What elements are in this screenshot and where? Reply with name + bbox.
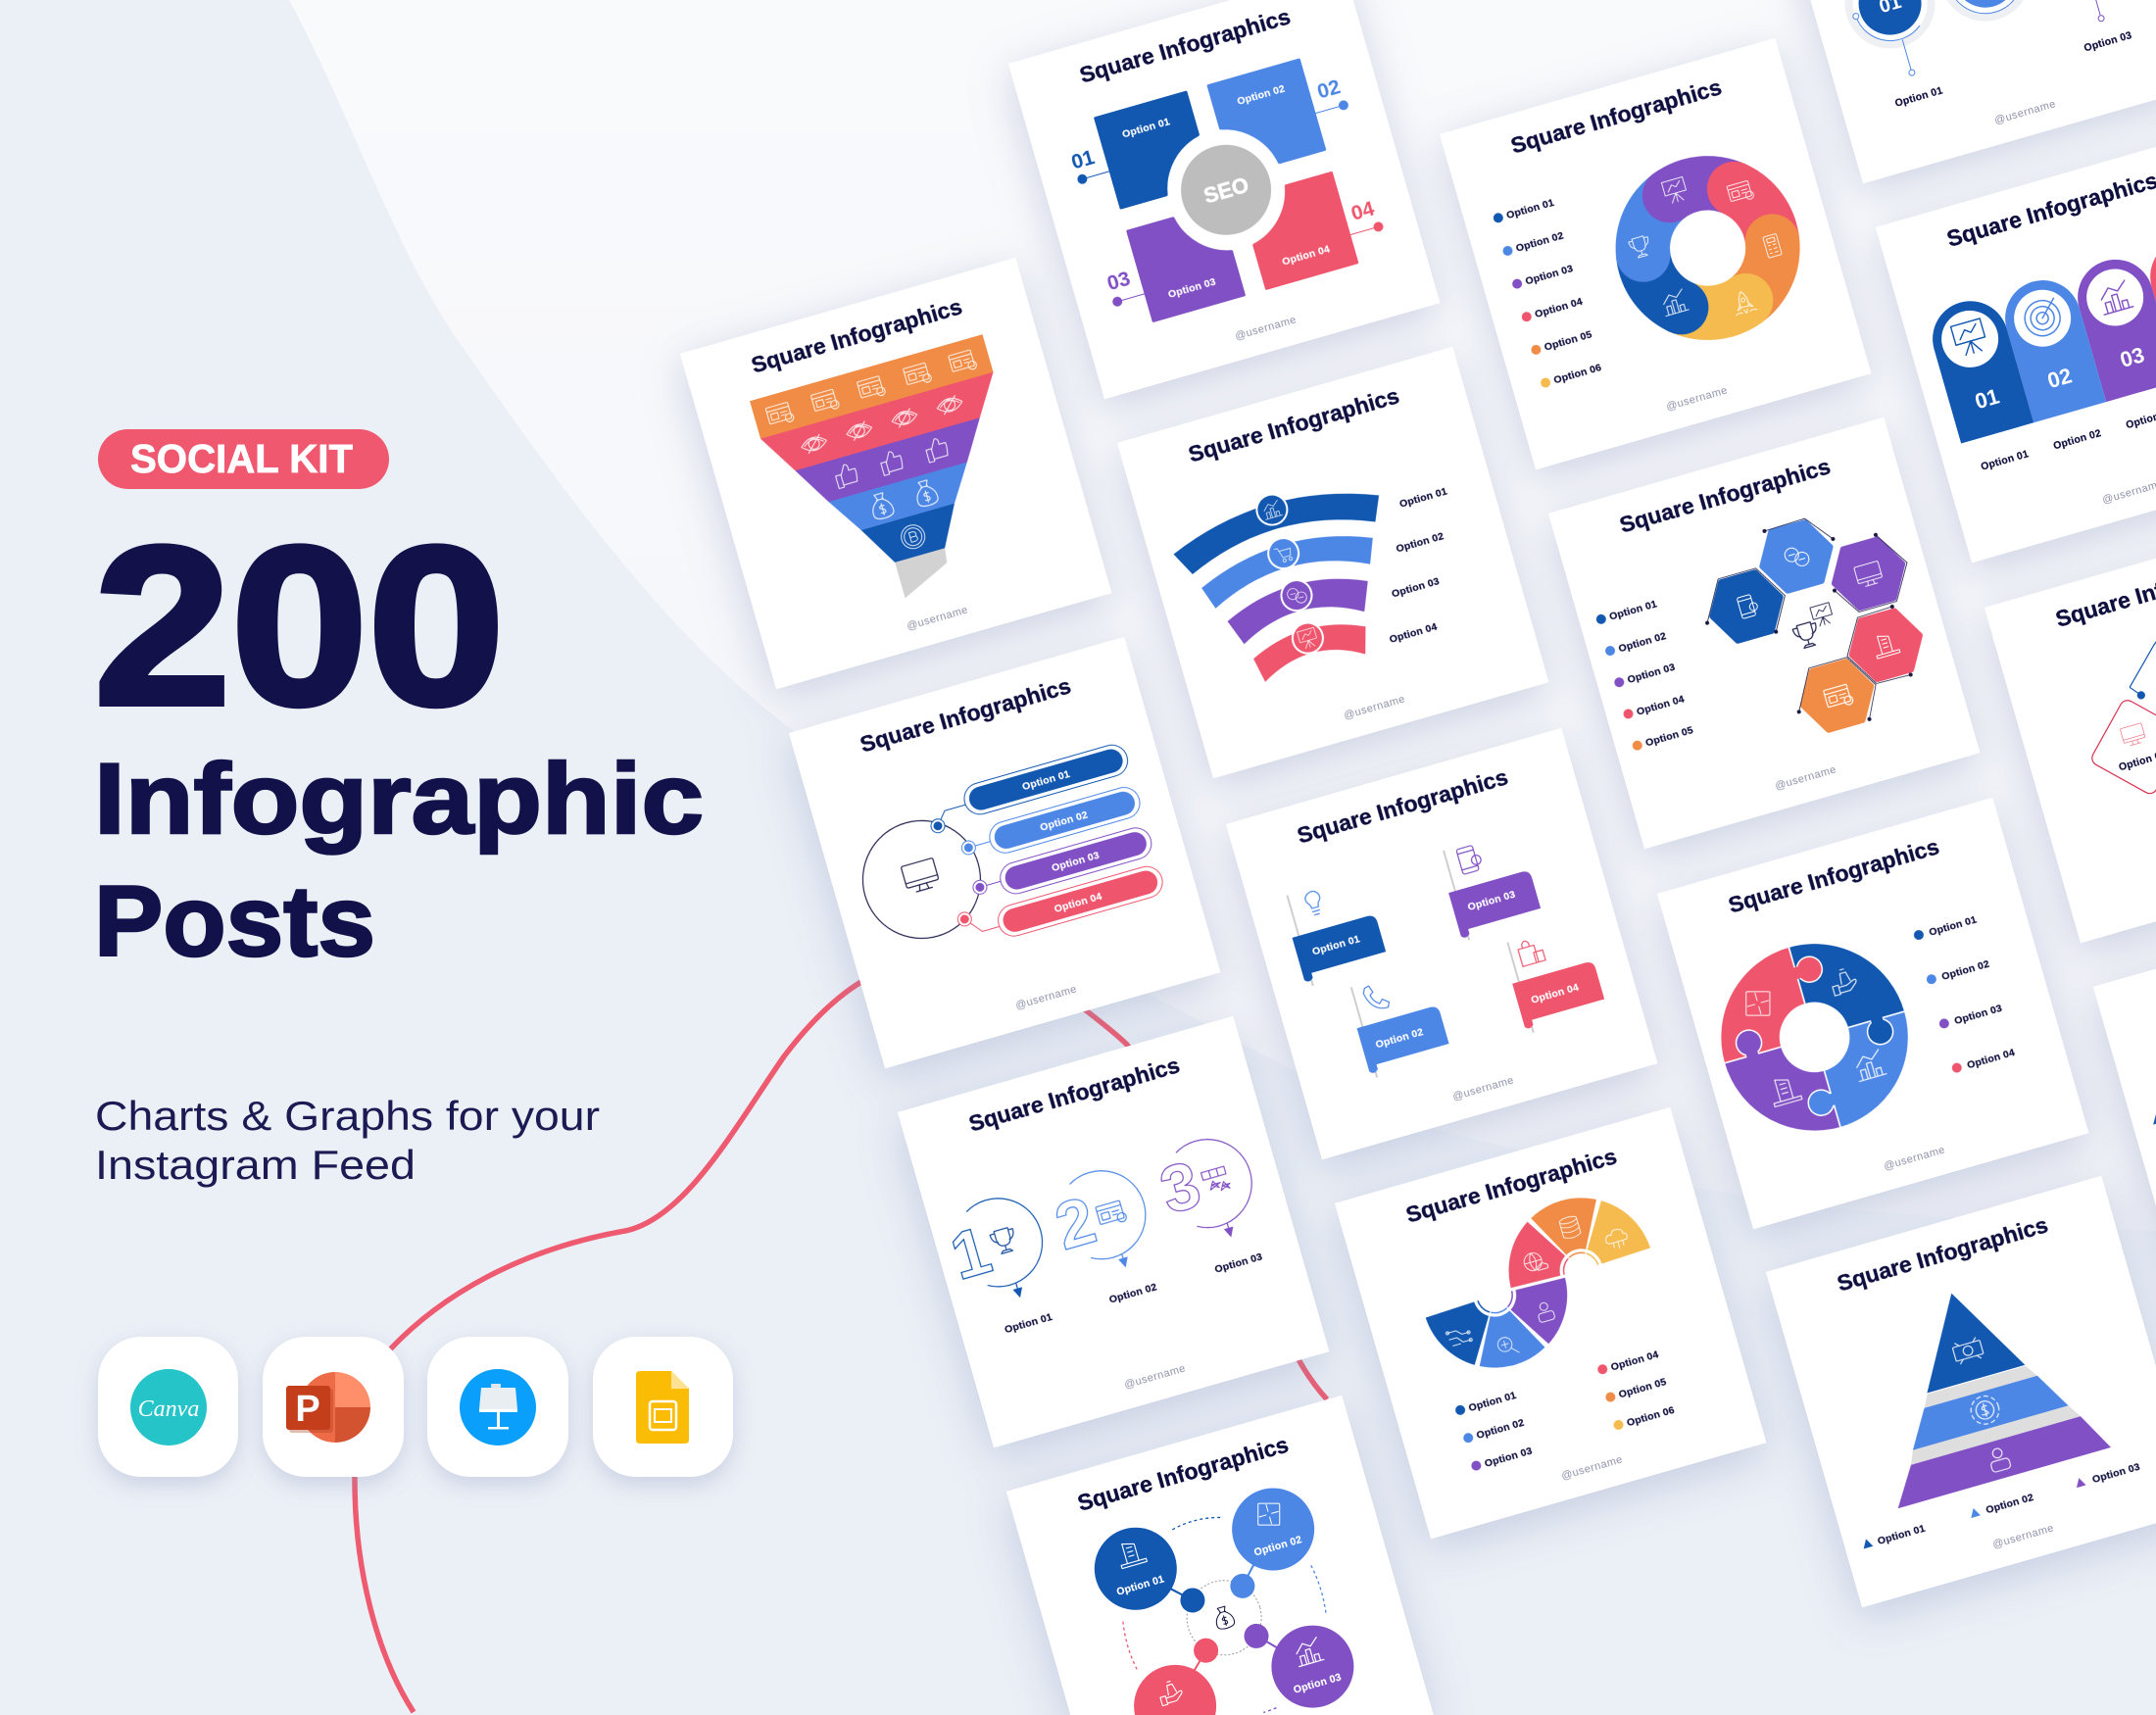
legend: Option 04 <box>1966 1047 2016 1071</box>
card title: Square Infographics <box>1075 1432 1292 1516</box>
hexagon blue <box>1752 512 1845 596</box>
option labels <box>1004 1250 1264 1336</box>
tab 03 <box>2069 251 2156 402</box>
card title: Square Infographics <box>1726 834 1942 918</box>
panel: flags card <box>1226 728 1657 1159</box>
option pills <box>959 741 1166 940</box>
flag 03 <box>1437 829 1544 942</box>
username: @username <box>1123 1362 1187 1392</box>
card title: Square Infographics <box>858 673 1074 758</box>
option labels: Option 02 <box>1107 1281 1158 1306</box>
funnel icons <box>765 349 1020 577</box>
hexagon red <box>1837 600 1930 692</box>
legend: Option 02 <box>1617 630 1668 655</box>
step icons <box>990 1165 1232 1258</box>
panel: pill list card <box>789 637 1220 1068</box>
band icons <box>1260 500 1320 650</box>
SEO circle <box>1170 134 1282 246</box>
subtitle: Instagram Feed <box>95 1142 416 1188</box>
card title: Square Infographics <box>1617 454 1834 538</box>
legend: Option 01 <box>1928 913 1979 939</box>
username: @username <box>1774 763 1838 793</box>
option labels: Option 04 <box>1388 621 1439 646</box>
numbered markers: 04 <box>1348 197 1377 225</box>
icon tile: powerpoint: P <box>295 1389 320 1430</box>
legend right <box>1596 1348 1676 1433</box>
stem dot <box>2097 15 2105 22</box>
funnel chart <box>750 334 1047 624</box>
numbered markers: 01 <box>1069 146 1098 174</box>
circle option 02: Option 02 <box>1252 1534 1303 1558</box>
heading: infographic posts <box>94 743 704 977</box>
panel: numbered circles card <box>898 1016 1329 1447</box>
heading: infographic posts: Infographic <box>94 743 704 855</box>
dashed arrow bottom <box>1263 1708 1277 1712</box>
card title: Square Infographics <box>1295 764 1511 849</box>
legend left <box>1454 1390 1534 1474</box>
username: @username <box>1014 983 1078 1012</box>
panel: network circles card <box>1006 1396 1434 1715</box>
app tiles <box>98 1337 733 1477</box>
light curved background shape <box>289 0 2156 1231</box>
panel: numbered tabs card <box>1876 131 2156 563</box>
option labels: Option 01 <box>1398 485 1448 511</box>
block labels: Option 03 <box>1167 276 1217 301</box>
panel: hexagons card <box>1548 417 1980 849</box>
central dotted ring <box>1178 1572 1270 1664</box>
tab labels <box>1980 407 2156 473</box>
icon: monitor <box>2120 723 2146 747</box>
circle option 03: Option 03 <box>1293 1671 1343 1696</box>
hexagon navy <box>1694 563 1794 652</box>
legend: Option 05 <box>1644 724 1694 749</box>
option labels: Option 03 <box>1213 1250 1264 1276</box>
tab 03: 03 <box>2117 342 2147 372</box>
legend right: Option 04 <box>1609 1348 1660 1374</box>
legend: Option 03 <box>1953 1003 2004 1027</box>
icon: money bag <box>1212 1605 1236 1631</box>
legend: Option 02 <box>1984 1492 2035 1516</box>
block labels: Option 02 <box>1236 82 1287 108</box>
step 3: 3 <box>1152 1147 1208 1228</box>
panel: six segment donut card <box>1440 38 1871 469</box>
card title: Square Infographics <box>1186 383 1402 467</box>
tab 02 <box>1996 271 2106 422</box>
legend <box>1594 598 1694 753</box>
connectors and dots <box>928 801 1013 937</box>
username: @username <box>1234 314 1298 343</box>
subtitle: Charts & Graphs for your <box>95 1093 600 1139</box>
blue marker <box>2150 1112 2156 1125</box>
panel: funnel card <box>680 258 1111 689</box>
card title: Square Infographics <box>1508 74 1725 159</box>
legend: Option 01 <box>1877 1523 1927 1547</box>
username: @username <box>1451 1074 1515 1103</box>
legend: Option 03 <box>1524 263 1575 287</box>
numbered markers <box>1069 74 1385 308</box>
red curved line <box>355 956 1327 1712</box>
flag 02: Option 02 <box>1374 1026 1425 1051</box>
numbered markers: 02 <box>1315 75 1343 104</box>
subtitle <box>95 1093 600 1188</box>
legend: Option 01 <box>1505 197 1555 221</box>
circle option 01: Option 01 <box>1115 1573 1166 1598</box>
curved bands <box>1167 474 1420 698</box>
tab 01 <box>1924 292 2034 444</box>
legend right: Option 05 <box>1617 1376 1668 1400</box>
panel: puzzle donut card <box>1657 798 2088 1229</box>
legend right: Option 06 <box>1626 1404 1676 1429</box>
step 3 <box>1152 1129 1265 1250</box>
username: @username <box>1883 1144 1946 1173</box>
panel: arc bands card <box>1117 347 1548 778</box>
legend left: Option 01 <box>1467 1390 1518 1414</box>
badge: social kit: SOCIAL KIT <box>130 436 353 481</box>
legend: Option 06 <box>1552 362 1603 386</box>
block labels <box>1121 82 1333 301</box>
username: @username <box>1560 1453 1624 1483</box>
option pills: Option 03 <box>1051 850 1101 874</box>
links and nodes <box>1164 1559 1283 1678</box>
username: @username <box>1343 693 1406 722</box>
icon tile: canva: Canva <box>138 1396 199 1422</box>
panel: pyramid card <box>1766 1176 2156 1607</box>
card shadows <box>680 0 2156 1715</box>
panel: top right ringed circles card <box>1767 0 2156 183</box>
option labels: Option 02 <box>1395 530 1446 555</box>
step 1 <box>940 1188 1056 1311</box>
card title: Square Infographics <box>1077 4 1294 88</box>
flag 03: Option 03 <box>1466 889 1517 913</box>
puzzle icons <box>1740 960 1886 1107</box>
tab labels: Option 01 <box>1980 448 2030 473</box>
SEO circle: SEO <box>1200 172 1251 209</box>
username: @username <box>906 604 969 633</box>
option labels <box>1893 29 2133 110</box>
username: @username <box>1993 98 2057 126</box>
panel: right diamonds card <box>1984 512 2156 943</box>
circle option 04 <box>1134 1665 1216 1715</box>
puzzle ring <box>1698 921 1931 1153</box>
inner arc accents <box>1473 1249 1603 1317</box>
icon: trophy and board <box>1788 603 1838 650</box>
option labels: Option 01 <box>1893 84 1944 110</box>
option pills: Option 04 <box>1053 891 1103 915</box>
panel: lower right card <box>2093 891 2156 1322</box>
tab 01: 01 <box>1972 384 2002 414</box>
icon tile: canva <box>98 1337 238 1477</box>
circle option 01 <box>1085 1518 1187 1620</box>
icon: monitor <box>901 858 941 894</box>
band icon circles <box>1252 491 1328 657</box>
snake icons <box>1424 1202 1649 1370</box>
ring 03 stem <box>2091 0 2100 16</box>
panel: SEO card <box>1008 0 1440 399</box>
step 2 <box>1045 1160 1159 1281</box>
snake arc chart <box>1405 1181 1671 1385</box>
option labels: Option 01 <box>1004 1311 1054 1336</box>
tab labels: Option 02 <box>2052 427 2102 452</box>
icon tile: powerpoint <box>263 1337 404 1477</box>
option labels: Option 03 <box>2082 29 2133 54</box>
heading: 200: 200 <box>94 500 505 752</box>
ring 01 <box>1835 0 1954 88</box>
step 1: 1 <box>943 1212 999 1295</box>
circle option 03 <box>1271 1626 1353 1708</box>
pyramid chart <box>1845 1263 2111 1508</box>
block labels: Option 04 <box>1281 243 1332 269</box>
card title: Square Infographics <box>1835 1212 2051 1297</box>
legend: Option 03 <box>2091 1461 2141 1486</box>
step 2: 2 <box>1048 1183 1103 1264</box>
option labels: Option 03 <box>1391 575 1441 600</box>
hexagon orange <box>1787 652 1885 740</box>
option pills: Option 02 <box>1039 808 1090 834</box>
legend left: Option 03 <box>1484 1445 1534 1470</box>
pyramid icons <box>1951 1337 2016 1474</box>
legend: Option 02 <box>1515 229 1565 255</box>
dashed arrows <box>1100 1493 1328 1670</box>
legend <box>1861 1461 2141 1551</box>
card title: Square Infographics <box>749 294 965 378</box>
username: @username <box>1665 384 1729 414</box>
icon tile: google slides <box>593 1337 733 1477</box>
legend: Option 03 <box>1626 662 1677 686</box>
legend <box>1493 197 1603 390</box>
tab 02: 02 <box>2044 363 2075 393</box>
hub circle <box>849 807 995 953</box>
card title: Square Infographics <box>1403 1144 1620 1228</box>
badge: social kit <box>98 429 389 489</box>
donut icons <box>1615 156 1795 339</box>
username: @username <box>1991 1522 2055 1551</box>
option pills: Option 01 <box>1021 768 1071 793</box>
navy diamond outline <box>2111 601 2156 701</box>
donut chart <box>1593 134 1822 362</box>
legend: Option 04 <box>1636 693 1686 718</box>
block labels: Option 01 <box>1121 116 1171 140</box>
legend <box>1913 913 2016 1076</box>
card title: Square Infographics <box>966 1053 1183 1137</box>
circle option 02 <box>1222 1479 1324 1580</box>
ring 02 <box>1930 0 2041 32</box>
heading: infographic posts: Posts <box>94 865 375 977</box>
flag 04: Option 04 <box>1530 981 1581 1006</box>
option labels <box>1353 485 1484 646</box>
card title: Square Infographics <box>1944 168 2156 252</box>
legend: Option 04 <box>1534 296 1584 320</box>
flag 04 <box>1501 921 1608 1035</box>
legend: Option 01 <box>1608 598 1658 623</box>
flag 01: Option 01 <box>1311 933 1361 957</box>
red diamond outline <box>2089 698 2156 796</box>
legend: Option 02 <box>1940 958 1991 983</box>
panel: snake arc card <box>1335 1107 1766 1539</box>
legend: Option 05 <box>1543 328 1593 354</box>
legend left: Option 02 <box>1475 1417 1526 1442</box>
tab 04 <box>2141 229 2156 381</box>
four quadrant blocks <box>1096 60 1357 320</box>
icon tile: keynote <box>427 1337 568 1477</box>
hexagon purple <box>1821 527 1917 617</box>
numbered markers: 03 <box>1104 268 1133 295</box>
flag 02 <box>1346 965 1452 1079</box>
flag 01 <box>1281 873 1390 988</box>
